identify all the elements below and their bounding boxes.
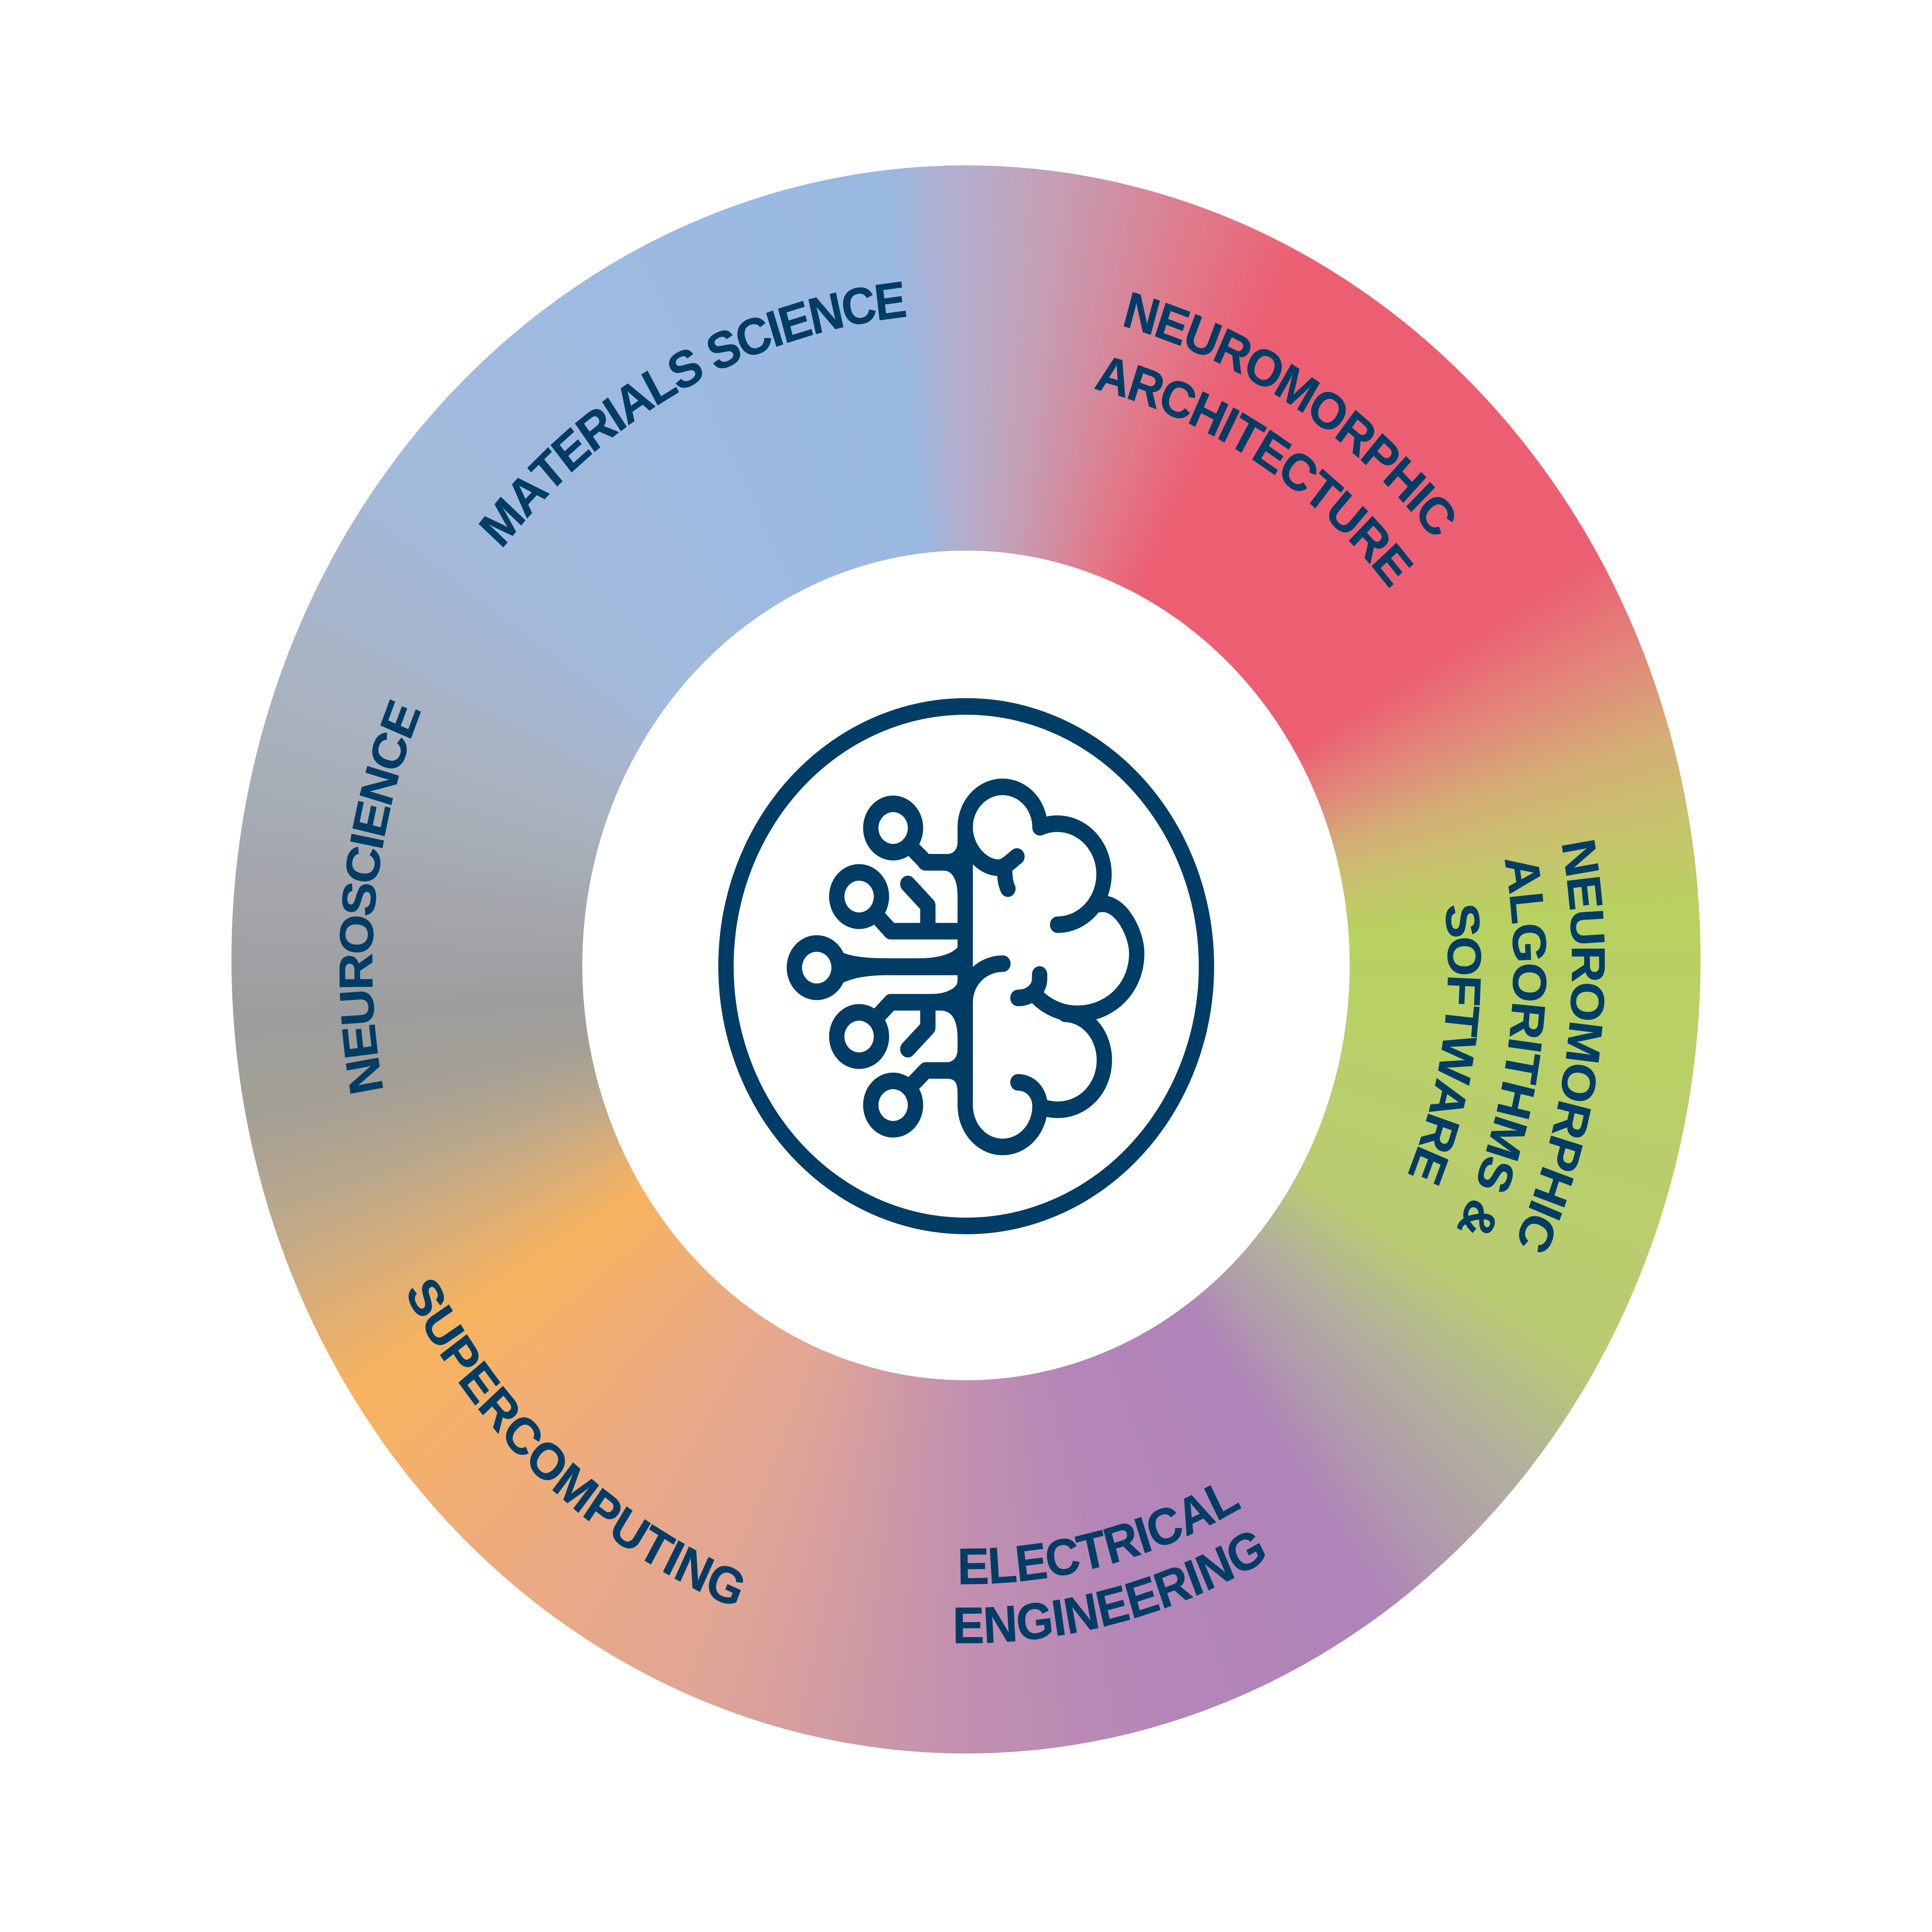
label: neuromorphic algorithms and software: SOFTWARE: [1398, 901, 1491, 1191]
panel: gradient discipline ring: [231, 165, 1701, 1753]
label: neuroscience: NEUROSCIENCE: [330, 694, 430, 1099]
brain outline: [965, 787, 1137, 1147]
label: neuromorphic algorithms and software: [1398, 835, 1615, 1260]
label: materials science: MATERIALS SCIENCE: [469, 271, 908, 557]
label: neuromorphic algorithms and software: ALGORITHMS &: [1447, 852, 1556, 1247]
circuit nodes: [794, 804, 915, 1129]
white centre of ring: [582, 551, 1350, 1380]
label: electrical engineering: ELECTRICAL: [957, 1466, 1247, 1595]
circuit traces: [838, 842, 969, 1092]
label: supercomputing: SUPERCOMPUTING: [395, 1269, 753, 1619]
icon: brain and circuit in circle: [726, 706, 1206, 1226]
label: electrical engineering: ENGINEERING: [952, 1517, 1274, 1654]
icon outer circle: [726, 706, 1206, 1226]
label: neuromorphic algorithms and software: NEUROMORPHIC: [1506, 835, 1615, 1260]
label: neuromorphic architecture: NEUROMORPHIC: [1118, 281, 1466, 547]
label: neuromorphic architecture: ARCHITECTURE: [1090, 344, 1422, 595]
